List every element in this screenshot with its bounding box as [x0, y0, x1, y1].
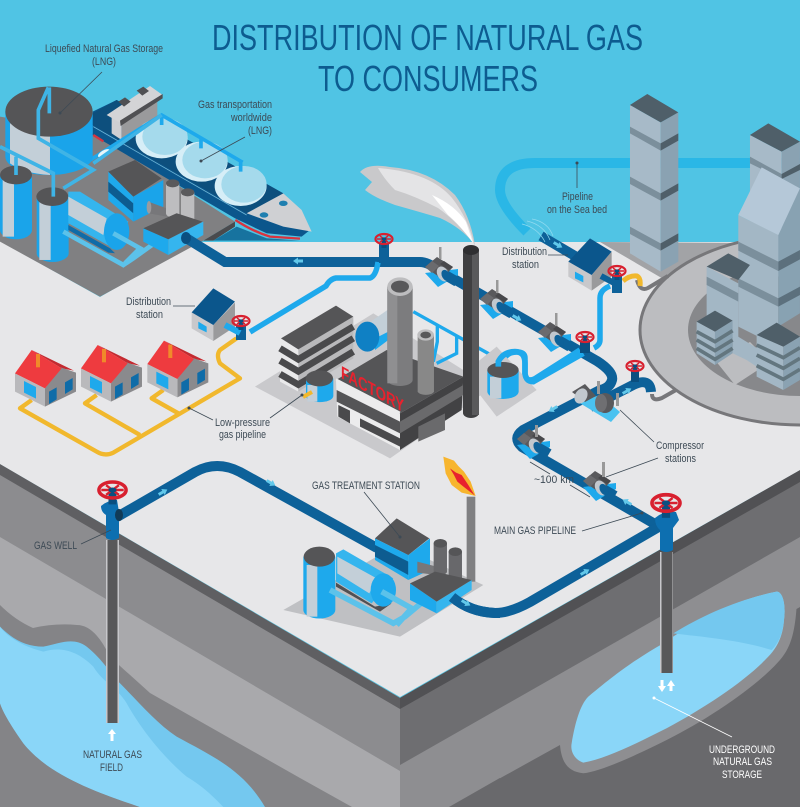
striped block left: [697, 311, 733, 365]
well shaft: [106, 540, 119, 723]
large stack: [387, 277, 413, 386]
label: main gas pipeline: MAIN GAS PIPELINE: [494, 525, 576, 537]
ground cross-section: left face: [0, 464, 400, 807]
compressor stations: [425, 247, 620, 501]
treatment pipes: [330, 590, 425, 625]
compressor F: [572, 381, 620, 422]
pipeline: station feed: [541, 236, 575, 256]
valve at left station: [225, 316, 250, 340]
label: sea pipeline: Pipeline: [562, 191, 593, 203]
label: low-pressure pipeline: gas pipeline: [219, 429, 266, 441]
well valve: [99, 482, 126, 504]
title: DISTRIBUTION OF NATURAL GAS: [212, 17, 643, 58]
pipeline: well to treatment: [117, 466, 377, 548]
low block: [707, 253, 760, 367]
small tank: [306, 370, 333, 402]
field arrow: [108, 729, 116, 741]
low-pressure yellow pipeline: [20, 338, 240, 454]
horizontal tank: [355, 309, 388, 352]
label: main gas pipeline: [494, 512, 644, 537]
striped block right: [757, 323, 800, 390]
cylinder stubs: [417, 539, 462, 585]
plaza light strip: [715, 342, 770, 385]
tower one: [630, 94, 678, 272]
valve at factory branch: [376, 234, 392, 263]
label: underground storage: STORAGE: [722, 769, 762, 781]
tall black chimney: [463, 245, 479, 418]
storage head: [655, 512, 679, 552]
pipeline cap at terminal: [181, 232, 191, 244]
storage arrows: [658, 680, 675, 692]
compressor A: [425, 247, 458, 287]
compressor station tank: [463, 347, 583, 417]
label: gas treatment: GAS TREATMENT STATION: [312, 480, 420, 492]
storage valve: [652, 495, 680, 518]
house three: [147, 341, 208, 397]
label: gas well: [34, 530, 111, 552]
label: right distribution station: [502, 246, 568, 271]
LNG terminal: [0, 86, 312, 297]
thin supply pipes: [250, 262, 610, 380]
factory building: [336, 350, 463, 450]
title: [212, 17, 643, 99]
yellow connector at factory: [303, 392, 312, 397]
ripples: pipeline entry: [522, 219, 553, 242]
valve at mid pipe: [576, 332, 594, 353]
LNG tanker: [85, 86, 312, 239]
label: natural gas field: NATURAL GAS: [83, 749, 142, 761]
label: gas transportation: Gas transportation: [198, 99, 272, 111]
vessel: [303, 547, 335, 618]
dock: [0, 117, 300, 297]
label: gas transportation: [198, 99, 272, 162]
factory complex: [255, 277, 500, 458]
small valves: [225, 234, 644, 382]
label: left distribution station: [126, 296, 195, 321]
label: gas well: GAS WELL: [34, 540, 77, 552]
valve at right station: [601, 266, 626, 293]
treatment outlet arrow: [460, 597, 472, 609]
valve at branch: [626, 361, 644, 382]
well pipe collar: [115, 509, 123, 521]
label: LNG storage: Liquefied Natural Gas Storage: [45, 43, 163, 55]
storage shaft: [660, 552, 673, 673]
plaza centre: [688, 264, 800, 396]
tower two and gabled building: [738, 123, 800, 347]
striped office block: [280, 306, 353, 392]
title: TO CONSUMERS: [318, 58, 538, 99]
yellow connector to city: [623, 276, 640, 286]
label: distance: [530, 462, 590, 497]
plaza ground: [600, 242, 740, 280]
label: low-pressure pipeline: [188, 394, 304, 441]
treatment yard: [283, 550, 483, 637]
horizontal tank: [336, 549, 396, 612]
label: underground storage: UNDERGROUND: [709, 744, 775, 756]
treatment outlet: [452, 597, 500, 613]
flame: [443, 457, 476, 496]
pipeline: treatment to storage: [452, 525, 662, 613]
left distribution station: [192, 288, 235, 341]
factory yard: [255, 313, 483, 458]
label: compressor stations: Compressor: [656, 440, 704, 452]
flow arrows: [157, 239, 633, 578]
label: sea pipeline: on the Sea bed: [547, 204, 607, 216]
storage tanks and equipment: [0, 87, 203, 265]
well head: [101, 500, 119, 540]
storage well: [652, 495, 680, 692]
label: left distribution station: Distribution: [126, 296, 171, 308]
land surface: [0, 241, 800, 697]
factory sign: FACTORY: [341, 363, 404, 417]
right distribution station: [568, 238, 612, 291]
label: natural gas field: FIELD: [100, 762, 123, 774]
label: underground storage: [652, 696, 775, 781]
label: sea pipeline: [547, 162, 607, 216]
label: LNG storage: (LNG): [92, 56, 116, 68]
plaza ring: [640, 235, 800, 425]
compressor B: [480, 280, 513, 319]
underground storage cavity: [500, 543, 797, 778]
house one: [15, 350, 76, 407]
box unit: [375, 518, 430, 580]
natural gas field: [0, 627, 265, 807]
label: right distribution station: Distribution: [502, 246, 547, 258]
gas treatment station: [283, 457, 483, 637]
houses: [15, 338, 240, 454]
label: right distribution station: station: [512, 259, 539, 271]
ground cross-section: right face: [400, 470, 800, 807]
label: LNG storage: [45, 43, 163, 114]
compressor D: [517, 425, 550, 459]
lower box: [410, 572, 472, 613]
pipeline: compressor branch: [590, 382, 651, 407]
gas well: [99, 482, 126, 741]
label: compressor stations: stations: [665, 453, 696, 465]
label: distance: ~100 km: [534, 474, 574, 486]
label: gas transportation: worldwide: [230, 112, 272, 124]
label: gas transportation: (LNG): [248, 125, 272, 137]
label: gas treatment: [312, 480, 420, 538]
city district: [600, 94, 800, 425]
small stack: [417, 329, 434, 395]
smoke plume: [360, 166, 475, 245]
label: low-pressure pipeline: Low-pressure: [215, 417, 270, 429]
compressor E: [583, 462, 616, 501]
label: underground storage: NATURAL GAS: [713, 756, 772, 768]
flare stack: [467, 497, 475, 582]
top main gas pipeline: [186, 238, 660, 527]
house two: [81, 345, 142, 402]
label: left distribution station: station: [136, 309, 163, 321]
label: compressor stations: [606, 410, 704, 477]
compressor C: [538, 313, 571, 352]
pipeline on the sea bed: [500, 163, 800, 232]
gray outlet pipes to city: [637, 276, 676, 399]
label: natural gas field: [83, 749, 142, 774]
coolant pipes: [413, 312, 500, 363]
